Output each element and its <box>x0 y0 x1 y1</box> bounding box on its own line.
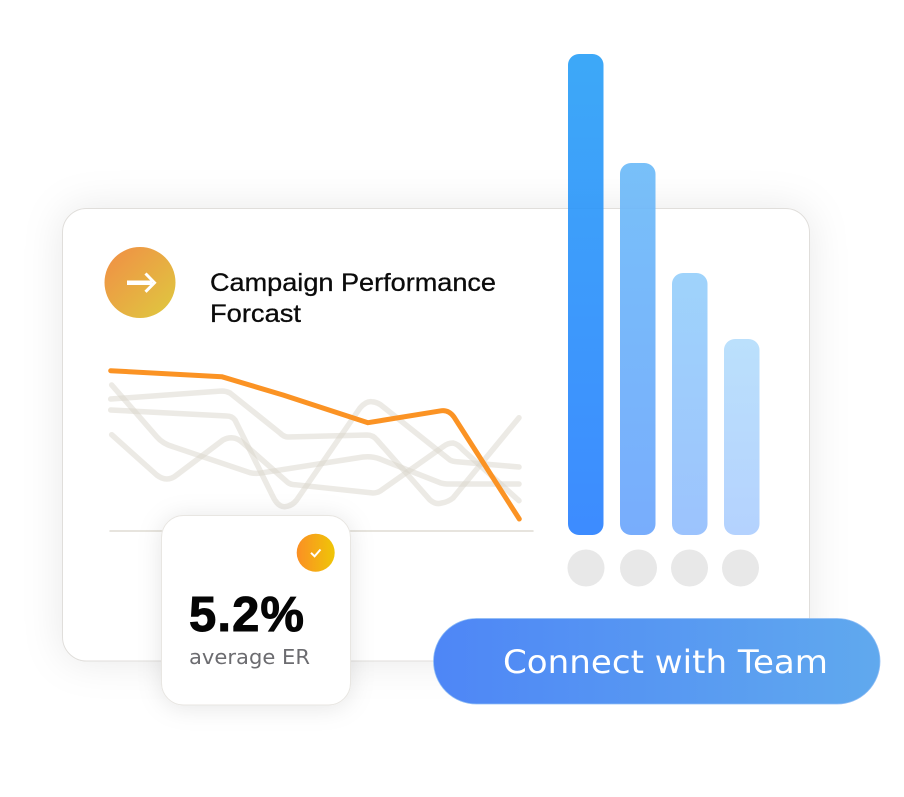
icon: arrow circle <box>104 247 176 318</box>
heading: chart title: Campaign Performance <box>210 269 496 297</box>
grey series lines <box>111 385 519 507</box>
panel: average ER card <box>162 516 350 705</box>
bar 3 <box>672 273 708 535</box>
icon: check badge <box>297 534 335 572</box>
heading: chart title: Forcast <box>210 300 301 328</box>
bar 1 <box>568 54 604 535</box>
bar chart <box>568 54 760 586</box>
bar label dots <box>568 550 759 586</box>
bar 4 <box>724 339 760 535</box>
metric value: 5.2% <box>189 588 304 642</box>
heading: chart title <box>210 269 496 328</box>
line chart <box>110 371 533 531</box>
chart baseline <box>110 530 533 532</box>
bar 2 <box>620 163 656 535</box>
orange highlighted series <box>111 371 519 519</box>
button: connect with team <box>434 618 880 704</box>
panel: main card <box>62 208 810 661</box>
metric label: average ER <box>189 645 310 669</box>
button: connect with team: Connect with Team <box>503 643 828 681</box>
